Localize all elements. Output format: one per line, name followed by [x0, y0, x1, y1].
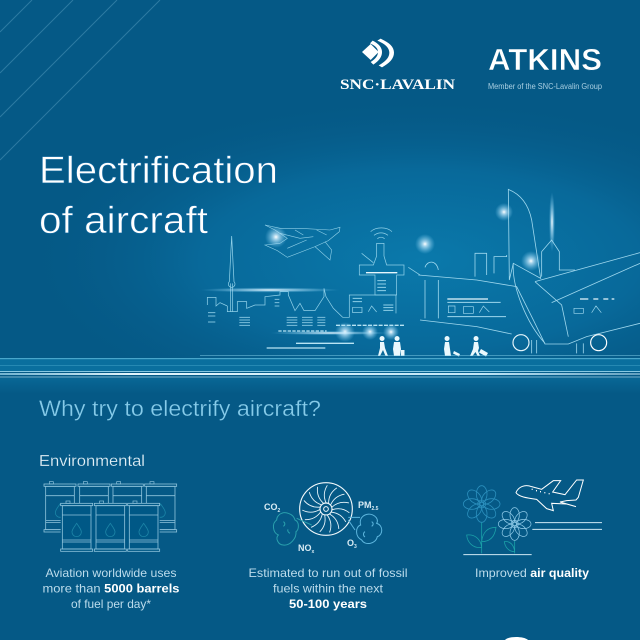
- caption: [248, 566, 408, 611]
- fuselage markings: [447, 297, 488, 301]
- caption: Aviation worldwide uses: [46, 566, 176, 580]
- title: of aircraft: [39, 200, 208, 242]
- glow lights: [200, 192, 555, 342]
- small flower: [498, 508, 531, 540]
- traveller 3: [444, 336, 460, 356]
- diagonal line pattern: [0, 0, 160, 160]
- SNC-Lavalin logo: [340, 39, 455, 93]
- panel: barrels: [42, 482, 180, 611]
- wordmark: ATKINS: [488, 42, 602, 77]
- caption: more than 5000 barrels: [42, 582, 180, 596]
- emission labels: [264, 500, 379, 555]
- wifi icon: [371, 228, 392, 239]
- large flower: [463, 486, 500, 522]
- speed lines: [532, 523, 602, 529]
- stabiliser wing: [513, 253, 640, 343]
- caption: 50-100 years: [289, 597, 367, 611]
- tagline: Member of the SNC-Lavalin Group: [488, 81, 602, 91]
- icon: turbine with emissions: [273, 483, 382, 545]
- caption: Improved air quality: [475, 566, 589, 580]
- wheels: [513, 335, 529, 351]
- hero glow: [0, 142, 640, 376]
- background skyscraper: [542, 240, 575, 277]
- TV tower: [228, 236, 235, 287]
- band below ground lines: [0, 378, 640, 394]
- turbine: [300, 483, 352, 535]
- ground lines: [0, 355, 640, 378]
- small flower stem: [504, 541, 515, 553]
- illustration: airport skyline: [207, 225, 420, 348]
- emission labels: CO: [264, 502, 278, 512]
- Atkins logo: [488, 42, 602, 91]
- title: Electrification: [39, 150, 278, 192]
- icon: flowers and plane: [463, 480, 602, 555]
- cloud right: [348, 514, 382, 544]
- ground line: [463, 553, 532, 556]
- subheading: environmental: Environmental: [39, 453, 145, 470]
- caption: [42, 566, 180, 611]
- heading: why try: Why try to electrify aircraft?: [39, 396, 321, 421]
- panel: emissions: [248, 483, 408, 611]
- terminal gable: [425, 262, 438, 318]
- logo wordmark: SNC·LAVALIN: [340, 77, 455, 93]
- icon: SNC-Lavalin mark: [362, 39, 394, 67]
- skyline outline: [207, 283, 396, 317]
- emission labels: 2: [278, 508, 280, 514]
- icon: fuel barrels: [44, 482, 177, 552]
- emission labels: 3: [354, 544, 357, 550]
- caption: of fuel per day*: [71, 597, 151, 611]
- emission labels: O: [347, 538, 354, 548]
- panel: air quality: [463, 480, 602, 580]
- emission labels: 2.5: [372, 506, 379, 512]
- building windows: [208, 299, 325, 325]
- traveller 4: [470, 336, 488, 356]
- fuselage: [418, 275, 640, 344]
- plane: [516, 480, 583, 511]
- caption: Estimated to run out of fossil: [248, 566, 408, 580]
- emission labels: x: [312, 549, 314, 555]
- emission labels: PM: [358, 500, 372, 510]
- cloud left: [273, 513, 312, 545]
- traveller 1: [378, 336, 388, 356]
- travellers: [378, 336, 488, 356]
- caption: fuels within the next: [273, 582, 384, 596]
- airborne plane: [265, 225, 340, 260]
- large flower stem: [467, 523, 496, 553]
- tail fin: [508, 189, 541, 280]
- runway lights: [267, 325, 404, 348]
- control tower: [353, 243, 420, 313]
- illustration: parked aircraft: [418, 189, 640, 353]
- emission labels: NO: [298, 543, 312, 553]
- next section icon top: [505, 637, 528, 640]
- traveller 2: [393, 336, 404, 356]
- title: [39, 150, 278, 242]
